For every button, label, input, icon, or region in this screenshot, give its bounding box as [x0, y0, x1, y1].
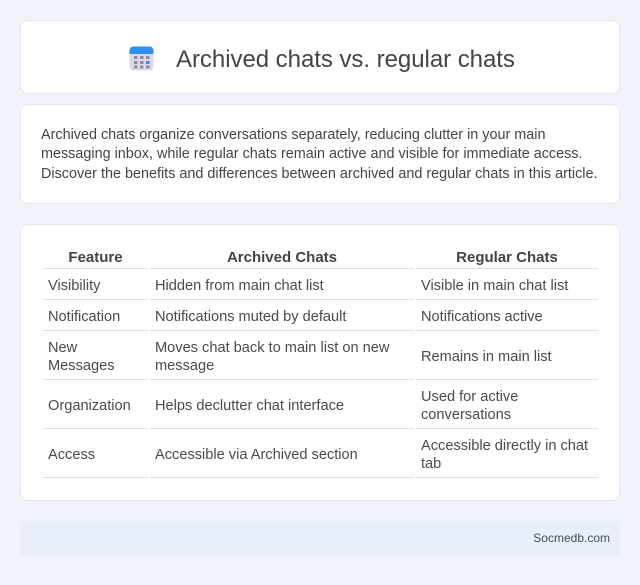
- row: visibility: Visible in main chat list: [421, 278, 568, 294]
- row: visibility: Visibility: [48, 278, 100, 294]
- footer bar: [20, 521, 620, 555]
- icon: calendar: [130, 46, 154, 70]
- row: access: [48, 438, 588, 472]
- row: new messages: New: [48, 340, 77, 356]
- row: new messages: Messages: [48, 358, 115, 374]
- intro paragraph: Discover the benefits and differences between archived and regular chats in this article.: [41, 166, 598, 182]
- row: notification: [48, 309, 543, 325]
- row: visibility: [48, 278, 568, 294]
- row: organization: conversations: [421, 407, 511, 423]
- row: access: tab: [421, 456, 441, 472]
- panel: intro text: [20, 104, 620, 204]
- row: notification: Notifications active: [421, 309, 543, 325]
- panel: comparison table: [20, 224, 620, 501]
- table header row: Feature: [68, 249, 123, 266]
- intro paragraph: Archived chats organize conversations separately, reducing clutter in your main: [41, 126, 545, 142]
- row: visibility: Hidden from main chat list: [155, 278, 324, 294]
- row: new messages: Remains in main list: [421, 349, 552, 365]
- row: new messages: [48, 340, 552, 374]
- row: access: Accessible directly in chat: [421, 438, 588, 454]
- row: organization: Organization: [48, 398, 131, 414]
- table header row: [68, 249, 558, 266]
- row: new messages: message: [155, 358, 214, 374]
- row: notification: Notification: [48, 309, 120, 325]
- title: Archived chats vs. regular chats: [176, 46, 515, 73]
- row: notification: Notifications muted by default: [155, 309, 346, 325]
- row: organization: Helps declutter chat interface: [155, 398, 344, 414]
- table header row: Regular Chats: [456, 249, 558, 266]
- row: organization: [48, 389, 518, 423]
- intro paragraph: messaging inbox, while regular chats remain active and visible for immediate access.: [41, 146, 582, 162]
- row: access: Accessible via Archived section: [155, 447, 358, 463]
- row: organization: Used for active: [421, 389, 518, 405]
- footer credit: Socmedb.com: [533, 531, 610, 545]
- intro paragraph: [41, 126, 598, 182]
- table header row: Archived Chats: [227, 249, 337, 266]
- row: new messages: Moves chat back to main list on new: [155, 340, 389, 356]
- row: access: Access: [48, 447, 95, 463]
- panel: header: [20, 20, 620, 94]
